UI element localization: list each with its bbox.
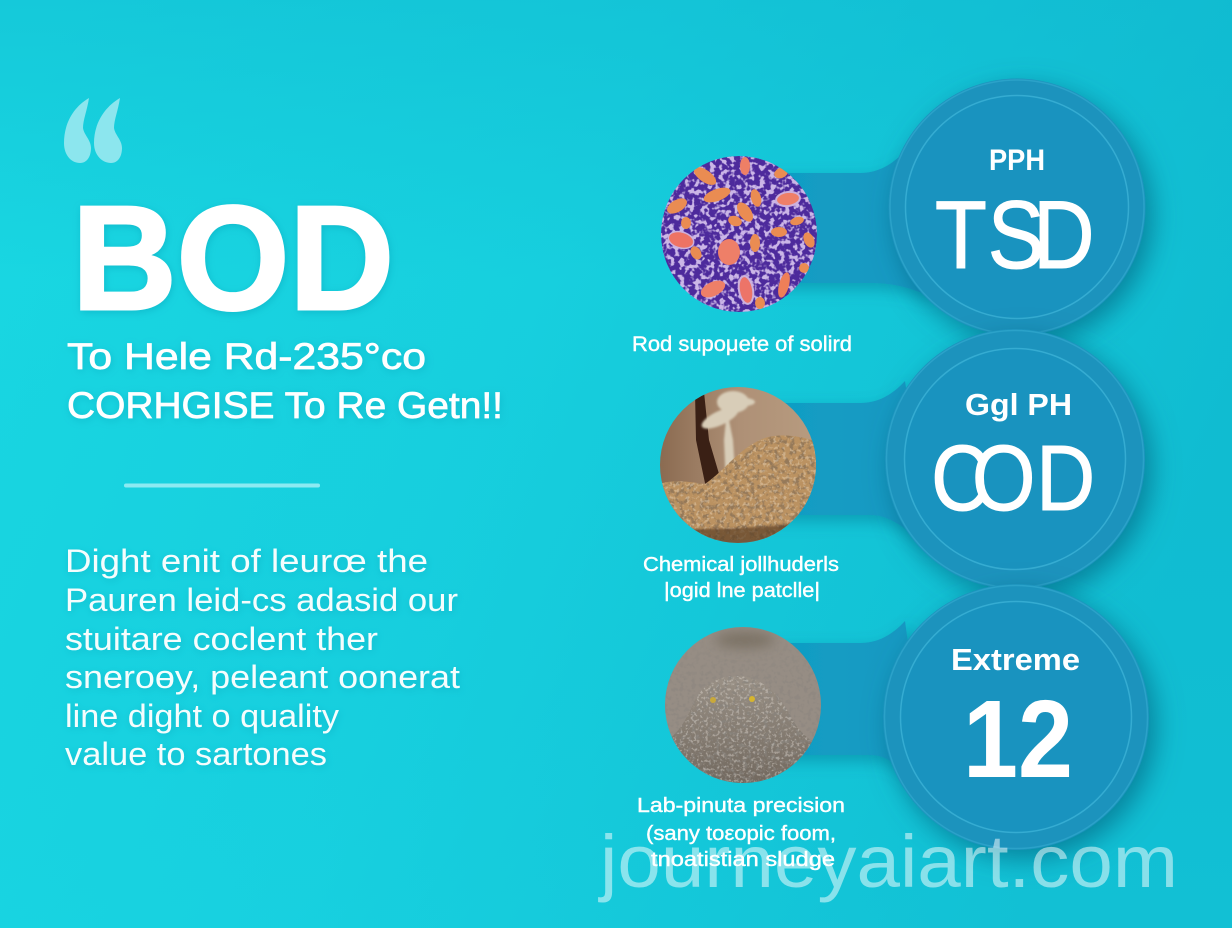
- body text: Dight enit of leurœ the: [65, 543, 428, 579]
- body text: sneroөy, peleant oonerat: [65, 659, 460, 695]
- caption: COD: [643, 554, 839, 602]
- panel: Extreme 12: [637, 584, 1149, 871]
- body text: stuitare coclent ther: [65, 621, 378, 657]
- panel: COD: [643, 329, 1145, 602]
- body text: [65, 543, 460, 772]
- body text: Pauren leid-cs adasid our: [65, 582, 458, 618]
- badge: TSD: TSD: [935, 181, 1095, 289]
- watermark: journeyaiart.com: [598, 820, 1178, 903]
- subtitle: CORHGISE To Re Getn!!: [67, 385, 503, 426]
- connector: TSD: [750, 150, 930, 296]
- subtitle: [67, 336, 503, 426]
- photo: microscope bacteria: [660, 155, 818, 313]
- photo: sand with stem: [660, 387, 816, 543]
- badge: TSD: PPH: [989, 144, 1045, 177]
- divider: [124, 484, 320, 488]
- badge: COD: Ggl PH: [965, 387, 1072, 422]
- badge: Extreme 12: 12: [963, 678, 1073, 801]
- badge: COD: COD: [931, 426, 1095, 530]
- badge: Extreme 12: Extreme: [951, 642, 1080, 677]
- panel: TSD: [632, 78, 1146, 356]
- caption: Extreme: (sany toεopic foom,: [646, 823, 836, 845]
- badge: Extreme 12: [883, 584, 1149, 850]
- caption: Extreme: tnoatistian sludge: [651, 849, 835, 871]
- caption: COD: Chemical jollhuderls: [643, 554, 839, 576]
- title: BOD: BOD: [72, 176, 394, 341]
- subtitle: To Hele Rd-235°co: [67, 336, 426, 377]
- caption: COD: |ogid lne patclle|: [664, 580, 820, 602]
- body text: line dight o quality: [65, 698, 339, 734]
- connector: COD: [750, 381, 930, 548]
- photo: grey sludge mound: [665, 627, 821, 783]
- badge: TSD: [888, 78, 1146, 336]
- badge: COD: [885, 329, 1145, 589]
- caption: Extreme: [637, 795, 845, 871]
- icon: quotation mark: [64, 98, 122, 163]
- connector: Extreme: [760, 621, 930, 804]
- body text: value to sartones: [65, 736, 327, 772]
- caption: Extreme: Lab-pinuta precision: [637, 795, 845, 817]
- caption: TSD: Rod supoμete of solird: [632, 333, 852, 356]
